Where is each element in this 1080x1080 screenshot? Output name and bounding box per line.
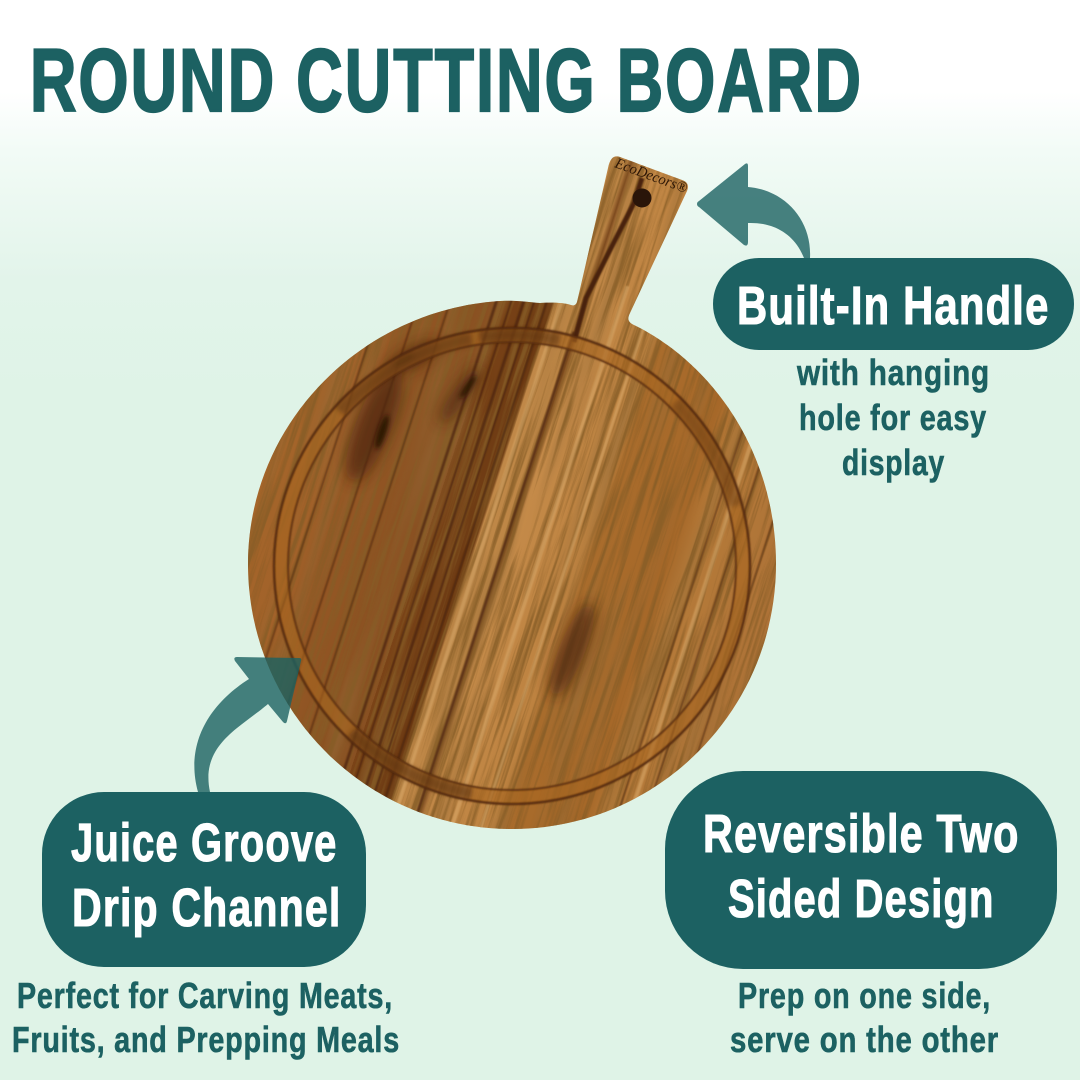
- label: reversible: [703, 804, 1020, 929]
- cutting board photo: [248, 156, 776, 829]
- wood grain planks: [248, 156, 776, 829]
- callout: reversible: [665, 771, 1057, 1060]
- text: juice groove description: Fruits, and Prepping Meals: [12, 1019, 400, 1060]
- handle dark streak: [574, 178, 642, 342]
- pill: built-in handle: [713, 258, 1074, 350]
- knot cores: [373, 352, 478, 450]
- brand mark: EcoDecors®: [612, 155, 690, 197]
- label: juice groove: Juice Groove: [71, 813, 338, 873]
- pill: reversible: [665, 771, 1057, 969]
- callout: built-in handle: [713, 258, 1074, 483]
- text: reversible description: Prep on one side,: [738, 975, 991, 1016]
- text: juice groove description: [12, 975, 400, 1060]
- text: hanging hole description: with hanging: [796, 352, 990, 393]
- dark knots: [335, 335, 603, 701]
- label: reversible: Sided Design: [728, 869, 994, 929]
- pill: juice groove: [42, 792, 366, 967]
- juice groove channel: [274, 328, 750, 804]
- arrow to handle: [697, 163, 810, 258]
- text: hanging hole description: [796, 352, 990, 483]
- text: reversible description: [730, 975, 999, 1060]
- label: juice groove: [71, 813, 342, 938]
- label: juice groove: Drip Channel: [72, 878, 342, 938]
- text: reversible description: serve on the other: [730, 1019, 999, 1060]
- text: hanging hole description: display: [842, 442, 945, 483]
- arrow to juice groove: [194, 657, 301, 792]
- text: hanging hole description: hole for easy: [799, 397, 987, 438]
- text: juice groove description: Perfect for Carving Meats,: [17, 975, 393, 1016]
- hanging hole: [632, 188, 652, 208]
- callout: juice groove: [12, 792, 400, 1060]
